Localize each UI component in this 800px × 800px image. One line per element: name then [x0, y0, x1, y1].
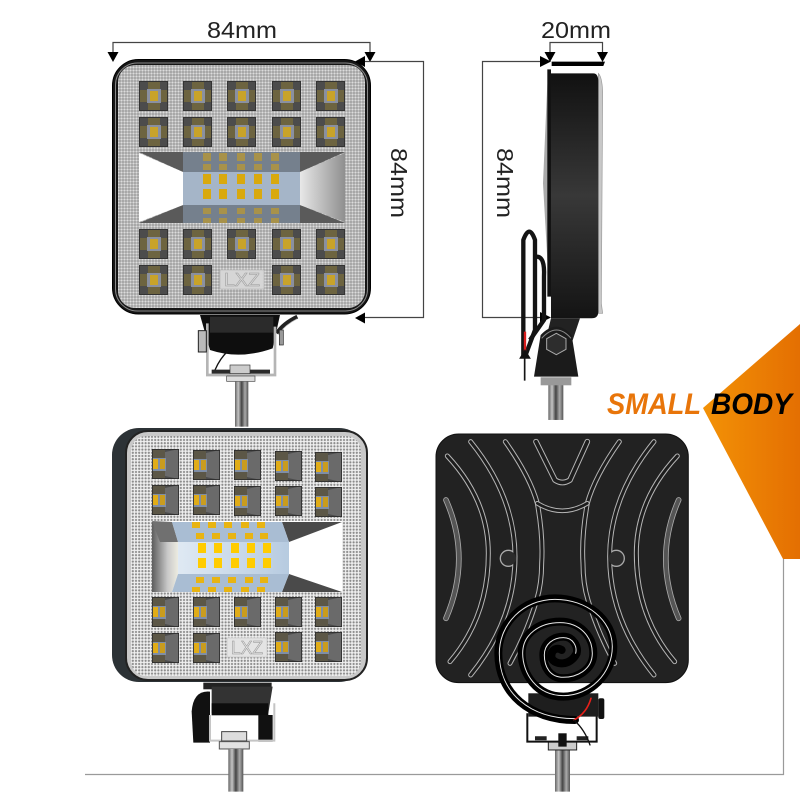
textured lens	[118, 65, 365, 308]
LED cells lower	[139, 229, 345, 295]
heading: small body	[607, 388, 795, 421]
LED cells upper	[139, 81, 345, 147]
rear fins left	[446, 442, 542, 675]
rear fins right	[583, 442, 679, 675]
mounting bracket	[198, 315, 297, 427]
rear housing	[436, 434, 688, 683]
lit logo plate: LXZ	[231, 638, 263, 658]
depth dimension 20mm: 20mm	[541, 17, 611, 43]
height dimension 84mm side: 84mm	[492, 148, 518, 218]
height dimension 84mm front: 84mm	[386, 148, 412, 218]
baseline frame line	[85, 559, 784, 774]
lit LED cells lower	[152, 597, 342, 663]
width dimension 84mm: 84mm	[207, 17, 277, 43]
rear fin strip	[543, 83, 548, 277]
width dimension 84mm	[108, 17, 376, 62]
side view lamp	[520, 62, 605, 420]
lit LED cells upper	[152, 449, 342, 517]
rear view lamp	[436, 434, 688, 792]
front view lamp, top	[112, 60, 370, 427]
heading: small body: BODY	[711, 388, 795, 421]
rear bracket	[527, 693, 604, 792]
wire loop	[520, 232, 544, 381]
lit center flood optic	[152, 521, 342, 592]
orange corner shape	[703, 324, 800, 559]
side bolt	[548, 378, 563, 420]
lit bracket	[192, 683, 274, 792]
logo plate: LXZ	[224, 270, 260, 290]
lit textured lens	[131, 436, 361, 676]
side lens strip	[598, 73, 603, 313]
height dimension 84mm side	[482, 56, 551, 323]
depth dimension 20mm	[541, 17, 611, 62]
heading: small body: SMALL	[607, 388, 701, 421]
side housing	[551, 73, 598, 318]
housing	[112, 60, 370, 314]
height dimension 84mm front	[355, 56, 424, 324]
lit housing	[112, 428, 366, 682]
center flood optic	[139, 152, 345, 223]
center v fin and arc	[536, 442, 587, 511]
top bezel	[552, 62, 605, 66]
coiled cable	[498, 598, 613, 745]
side bracket	[534, 318, 580, 385]
front view lamp, lit	[112, 428, 367, 792]
